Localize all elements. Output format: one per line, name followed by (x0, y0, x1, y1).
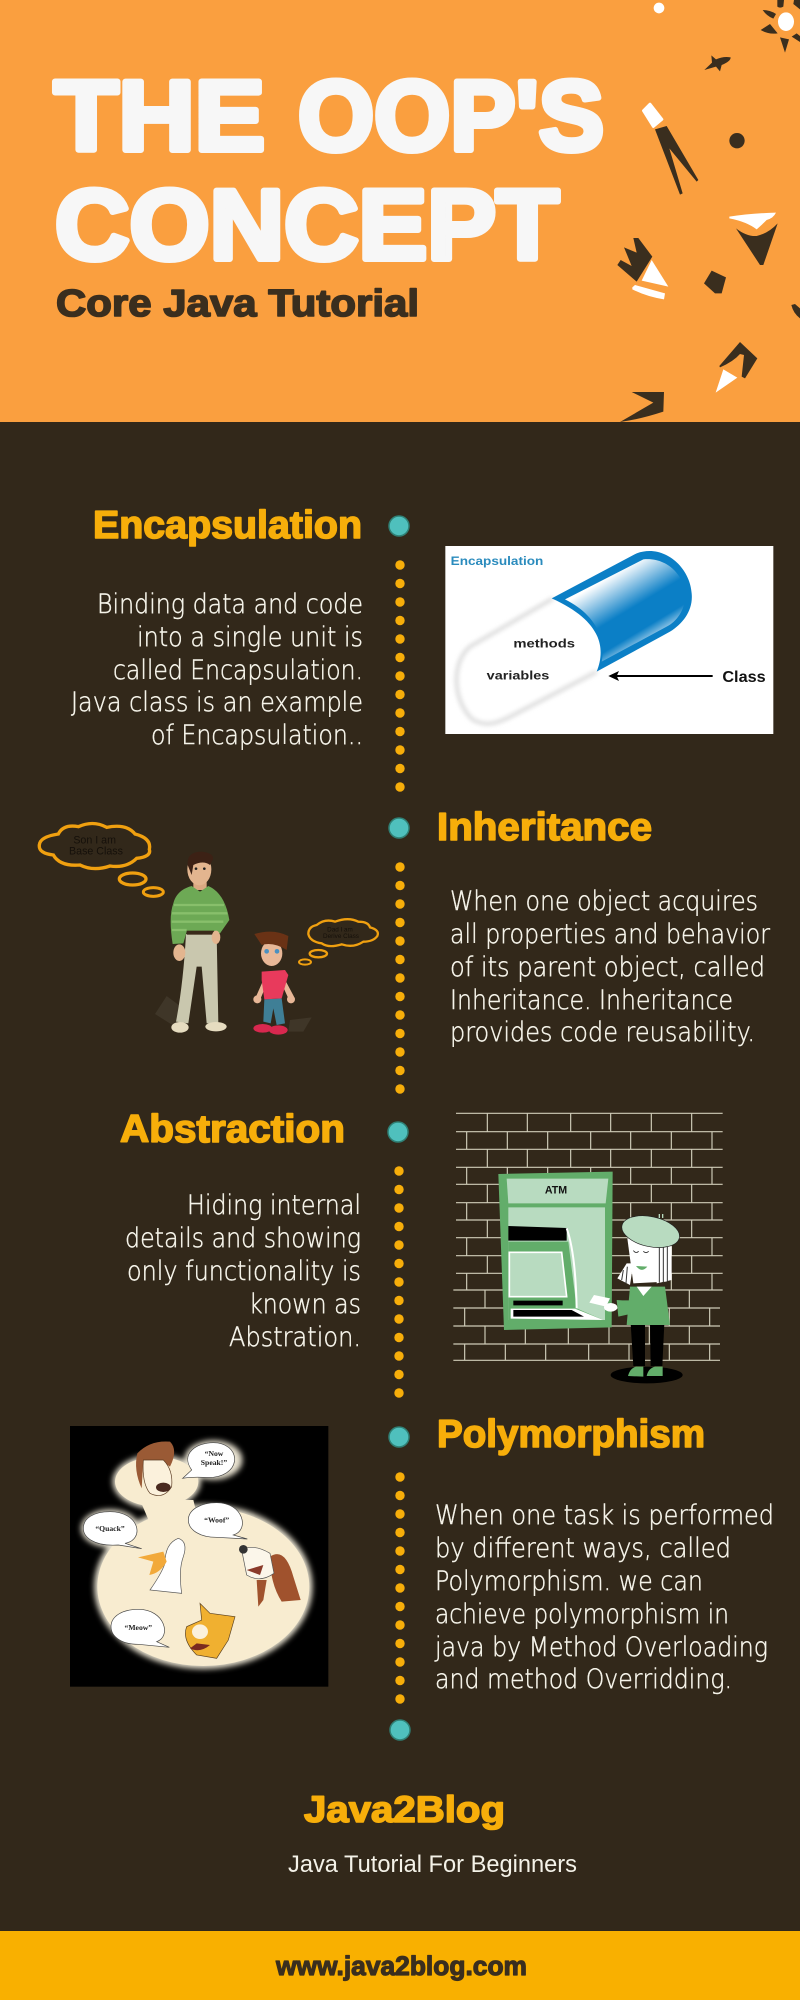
text: inheritance description: When one object acquires (450, 886, 758, 917)
illustration: ATM (453, 1113, 723, 1383)
text: polymorphism description: achieve polymorphism in (435, 1599, 729, 1630)
text: abstraction description: known as (249, 1289, 361, 1320)
text: polymorphism description: Polymorphism. we can (435, 1566, 703, 1597)
text: polymorphism description: by different ways, called (435, 1533, 731, 1564)
character: dog (239, 1545, 301, 1607)
text: encapsulation description: Binding data and code (97, 589, 363, 620)
text: abstraction description: Abstration. (229, 1322, 361, 1353)
subtitle: Core Java Tutorial (56, 283, 419, 325)
thought cloud: father: Base Class (69, 846, 123, 858)
title: CONCEPT (55, 169, 559, 280)
speech bubble: woof (188, 1503, 247, 1539)
timeline (388, 516, 410, 1740)
text: abstraction description (125, 1190, 361, 1353)
illustration: animals speaking (70, 1426, 328, 1687)
illustration: capsule diagram: Class (722, 669, 766, 686)
heading: abstraction: Abstraction (120, 1108, 345, 1151)
character: man (136, 1441, 174, 1496)
panel: abstraction (120, 1108, 723, 1383)
thought cloud: son (299, 919, 378, 965)
text: inheritance description: of its parent object, called (450, 952, 765, 983)
text: inheritance description: Inheritance. Inheritance (450, 985, 733, 1016)
website url: www.java2blog.com (275, 1951, 527, 1981)
speech bubble: quack (83, 1512, 142, 1549)
heading: polymorphism: Polymorphism (437, 1413, 705, 1456)
text: abstraction description: only functionality is (127, 1256, 361, 1287)
speech bubble: quack: “Quack” (95, 1524, 125, 1533)
text: abstraction description: Hiding internal (187, 1190, 361, 1221)
thought cloud: father (39, 823, 163, 896)
speech bubble: now speak: “Now (205, 1449, 224, 1458)
illustration: father and son (39, 823, 378, 1035)
thought cloud: son: Derive Class (323, 933, 359, 940)
footer band (0, 1931, 800, 2000)
header band (0, 0, 800, 422)
thought cloud: father: Son I am (73, 834, 116, 846)
heading: inheritance: Inheritance (437, 806, 652, 849)
figure: woman (589, 1211, 683, 1383)
text: abstraction description: details and showing (125, 1223, 361, 1254)
speech bubble: now speak (183, 1443, 235, 1478)
illustration: capsule diagram: Encapsulation (451, 554, 543, 568)
speech bubble: meow (111, 1609, 169, 1647)
figure: son (253, 932, 295, 1035)
character: duck (138, 1538, 185, 1593)
title (54, 60, 604, 280)
text: encapsulation description: called Encapsulation. (113, 655, 363, 686)
illustration: ATM: ATM (545, 1185, 567, 1197)
brand name: Java2Blog (304, 1789, 505, 1830)
panel: polymorphism (70, 1413, 774, 1695)
title: THE (54, 60, 265, 171)
speech bubble: meow: “Meow” (125, 1623, 152, 1632)
text: inheritance description (450, 886, 771, 1048)
text: encapsulation description: of Encapsulation.. (151, 720, 363, 751)
text: encapsulation description (71, 589, 363, 751)
panel: encapsulation (71, 504, 773, 751)
heading: encapsulation: Encapsulation (93, 504, 362, 547)
thought cloud: son: Dad I am (327, 926, 353, 933)
illustration: capsule diagram (445, 546, 773, 734)
speech bubble: woof: “Woof” (204, 1516, 229, 1525)
text: encapsulation description: Java class is an example (71, 687, 363, 718)
text: inheritance description: provides code reusability. (450, 1017, 755, 1048)
text: polymorphism description (434, 1500, 774, 1695)
title: OOP'S (298, 60, 604, 171)
character: cat (185, 1603, 235, 1658)
decorative shapes (617, 0, 800, 422)
illustration: capsule diagram: methods (513, 637, 575, 651)
tagline: Java Tutorial For Beginners (288, 1851, 577, 1878)
illustration: capsule diagram: variables (487, 668, 549, 682)
text: encapsulation description: into a single unit is (137, 622, 363, 653)
text: polymorphism description: and method Overridding. (435, 1664, 732, 1695)
figure: father (171, 852, 229, 1033)
panel: inheritance (39, 806, 771, 1048)
speech bubble: now speak: Speak!” (201, 1458, 227, 1467)
